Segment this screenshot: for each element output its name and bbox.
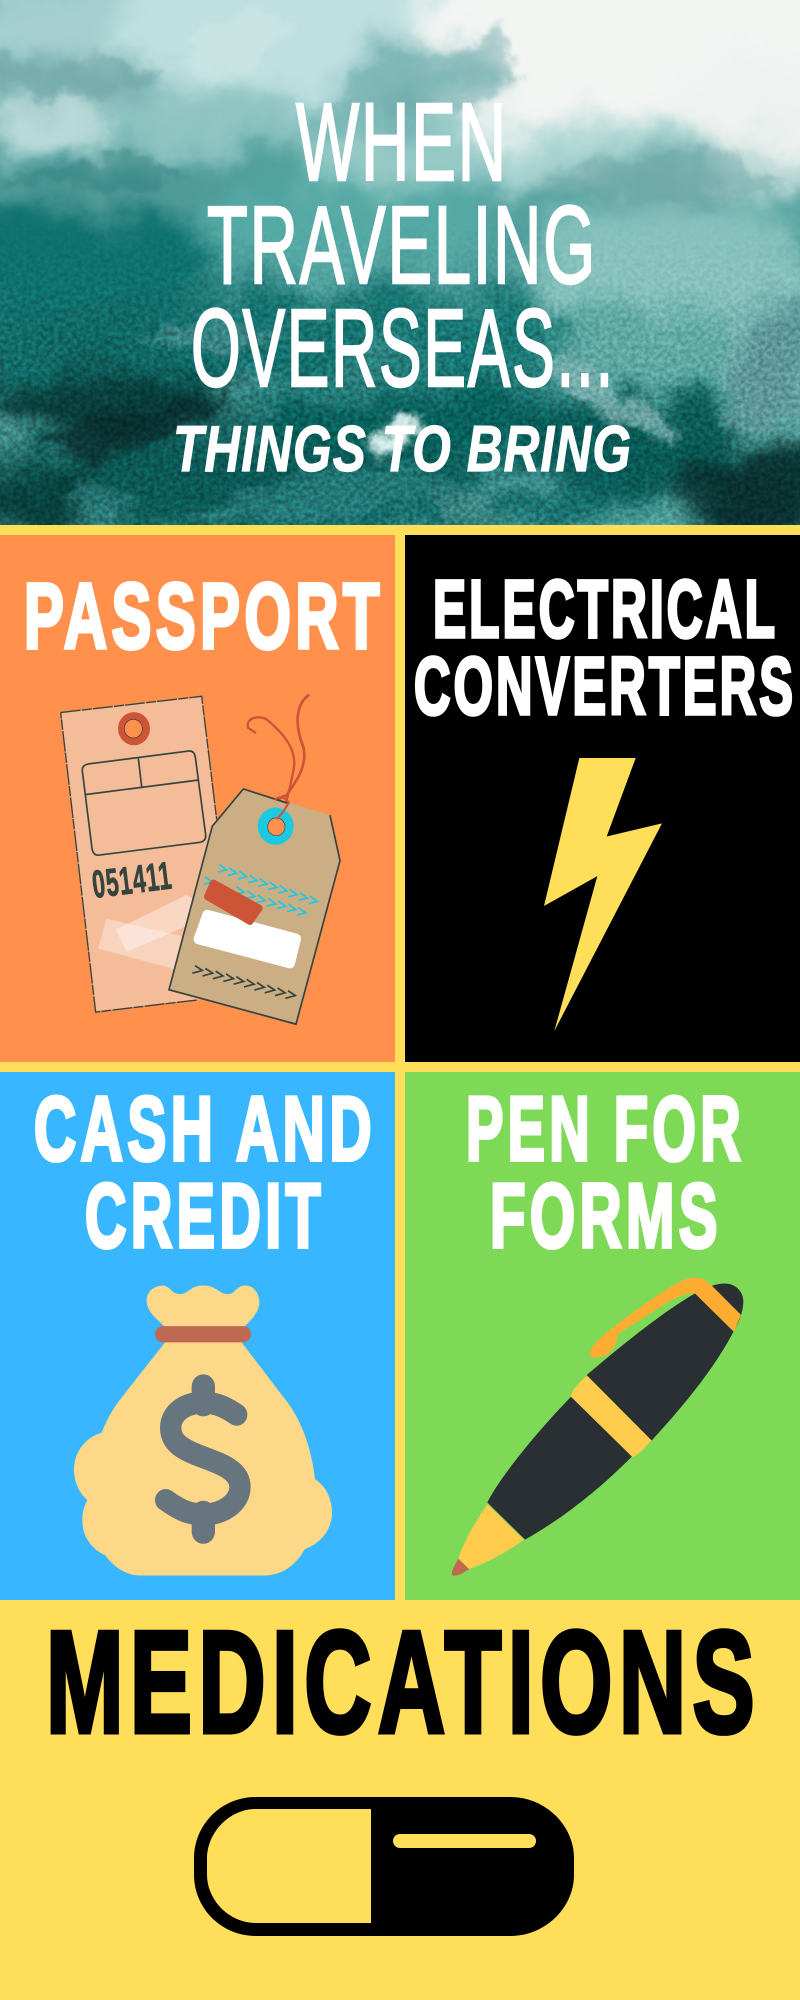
panel: hero header xyxy=(0,0,800,535)
panel: cash and credit xyxy=(0,1072,395,1600)
panel: pen for forms xyxy=(405,1072,800,1600)
hero ocean background xyxy=(0,0,800,535)
panel: passport xyxy=(0,535,395,1062)
heading: cash and credit: CREDIT xyxy=(85,1166,325,1267)
heading: cash and credit xyxy=(34,1079,376,1267)
icon: lightning bolt xyxy=(544,758,662,1031)
heading: electrical converters xyxy=(414,564,796,732)
icon: money bag xyxy=(74,1286,332,1575)
heading: cash and credit: CASH AND xyxy=(34,1079,376,1180)
heading: passport: PASSPORT xyxy=(24,564,384,668)
icon: luggage tags xyxy=(61,695,340,1024)
heading: pen for forms xyxy=(466,1079,745,1267)
tag number: 051411 xyxy=(90,855,175,907)
subtitle: THINGS TO BRING xyxy=(173,412,632,485)
title: WHEN xyxy=(296,81,508,204)
panel: medications xyxy=(0,1600,800,2000)
panel: electrical converters xyxy=(405,535,800,1062)
title xyxy=(191,81,615,410)
icon: capsule xyxy=(194,1797,574,1936)
icon: pen xyxy=(452,1278,743,1576)
